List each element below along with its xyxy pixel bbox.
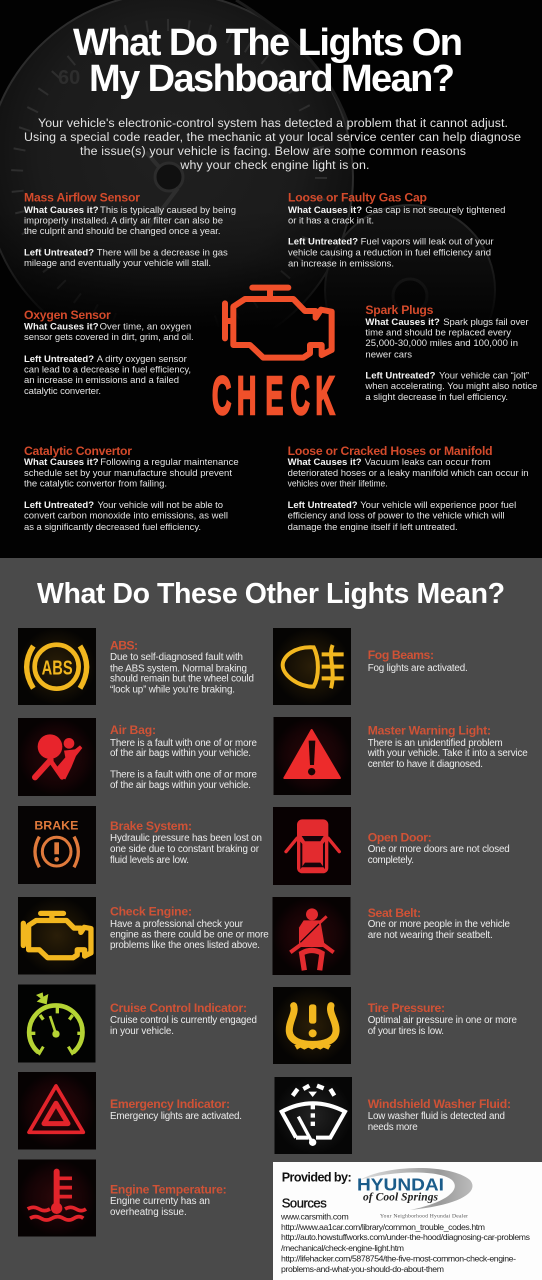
text: tire pressure description: of your tires is low. xyxy=(368,1026,444,1037)
heading: brake system: Brake System: xyxy=(110,819,192,833)
text: washer description: Low washer fluid is detected and xyxy=(368,1111,505,1122)
icon: fog beams xyxy=(273,628,351,705)
text: master warning description: There is an unidentified problem xyxy=(368,738,503,749)
panel: open door xyxy=(273,807,510,885)
text: brake description xyxy=(110,833,262,866)
text: gas cap details: Fuel vapors will leak out of your xyxy=(361,237,494,248)
text: source links: /mechanical/check-engine-light.htm xyxy=(281,1243,404,1253)
text: oxygen sensor details: catalytic converter. xyxy=(24,386,101,397)
text: open door description xyxy=(368,844,510,866)
heading: master warning: Master Warning Light: xyxy=(368,723,491,737)
text: source links xyxy=(280,1211,531,1274)
panel: air bag xyxy=(18,718,258,796)
icon: engine temperature xyxy=(18,1160,96,1236)
logo: Hyundai of Cool Springs xyxy=(357,1168,472,1219)
icon: brake: BRAKE xyxy=(34,818,78,832)
panel: catalytic convertor xyxy=(24,444,239,533)
panel: cruise control xyxy=(18,984,257,1062)
text: oxygen sensor details: Left Untreated? xyxy=(24,354,94,365)
text: engine temperature description: Engine currenty has an xyxy=(110,1196,210,1207)
icon: brake xyxy=(18,806,96,884)
text: gas cap details: Gas cap is not securely tightened xyxy=(365,205,505,216)
logo: Hyundai of Cool Springs: HYUNDAI xyxy=(357,1175,444,1195)
intro text xyxy=(24,116,521,172)
text: ABS description: Due to self-diagnosed fault with xyxy=(110,652,243,663)
panel: ABS xyxy=(18,628,254,705)
label: CHECK: CHECK xyxy=(212,366,335,425)
title: My Dashboard Mean? xyxy=(89,58,455,100)
heading: gas cap: Loose or Faulty Gas Cap xyxy=(288,191,427,205)
text: check engine description: problems like the ones listed above. xyxy=(110,940,260,951)
text: brake description: Hydraulic pressure has been lost on xyxy=(110,833,262,844)
heading: seat belt: Seat Belt: xyxy=(368,906,421,920)
text: mass airflow details: What Causes it? xyxy=(24,205,99,216)
text: tire pressure description: Optimal air pressure in one or more xyxy=(368,1015,518,1026)
text: washer description: needs more xyxy=(368,1122,418,1133)
panel: seat belt xyxy=(272,897,511,975)
heading: washer fluid: Windshield Washer Fluid: xyxy=(368,1097,511,1111)
text: hoses details: Vacuum leaks can occur from xyxy=(365,457,491,468)
text: oxygen sensor details: sensor gets covered in dirt, grim, and oil. xyxy=(24,332,194,343)
text: air bag description: of the air bags within your vehicle. xyxy=(110,780,251,791)
panel: brake system xyxy=(18,806,262,884)
text: cruise description: in your vehicle. xyxy=(110,1026,174,1037)
intro text: Your vehicle's electronic-control system has detected a problem that it cannot adjust. xyxy=(38,116,508,130)
text: gas cap details: Left Untreated? xyxy=(288,237,358,248)
text: cruise description: Cruise control is currently engaged xyxy=(110,1015,257,1026)
intro text: the issue(s) your vehicle is facing. Below are some common reasons xyxy=(80,144,466,158)
icon: windshield washer xyxy=(274,1077,352,1154)
text: catalytic convertor details: as a significantly decreased fuel efficiency. xyxy=(24,522,201,533)
text: air bag description: There is a fault with one of or more xyxy=(110,770,258,780)
text: hoses details: damage the engine itself if left untreated. xyxy=(288,522,458,533)
panel: grey lower section xyxy=(0,558,542,1280)
title: What Do The Lights On xyxy=(73,22,463,64)
text: ABS description: “lock up” while you’re braking. xyxy=(110,685,235,696)
text: brake description: one side due to constant braking or xyxy=(110,844,260,855)
panel: oxygen sensor xyxy=(24,308,194,397)
logo: Hyundai of Cool Springs: of Cool Springs xyxy=(363,1192,439,1204)
heading: oxygen sensor: Oxygen Sensor xyxy=(24,308,111,322)
text: source links: www.carsmith.com xyxy=(280,1211,349,1221)
heading: tire pressure: Tire Pressure: xyxy=(368,1001,445,1015)
heading: sources: Sources xyxy=(282,1196,327,1211)
icon: emergency triangle xyxy=(18,1072,96,1150)
text: mass airflow details: There will be a decrease in gas xyxy=(97,248,228,258)
text: engine temperature description xyxy=(110,1196,210,1218)
text: fog description: Fog lights are activated. xyxy=(368,663,468,674)
text: brake description: fluid levels are low. xyxy=(110,855,189,866)
text: hoses details: efficiency and loss of power to the vehicle which will xyxy=(288,511,505,522)
text: spark plugs details: time and should be replaced every xyxy=(365,328,511,339)
text: catalytic convertor details: Left Untreated? xyxy=(24,500,94,511)
icon: large check engine light xyxy=(212,288,335,425)
text: spark plugs details: a slight decrease in fuel efficiency. xyxy=(365,392,508,403)
text: oxygen sensor details: Over time, an oxygen xyxy=(100,322,191,332)
title xyxy=(73,22,463,100)
heading: check engine: Check Engine: xyxy=(110,905,192,919)
panel: spark plugs xyxy=(364,303,537,403)
text: gas cap details: or it has a crack in it. xyxy=(288,216,374,226)
panel: windshield washer fluid xyxy=(274,1077,511,1154)
heading: emergency indicator: Emergency Indicator: xyxy=(110,1097,230,1111)
text: washer description xyxy=(368,1111,505,1133)
text: catalytic convertor details: schedule set by your manufacture should prevent xyxy=(24,468,232,479)
panel: provided by and sources xyxy=(273,1162,542,1280)
text: spark plugs details: What Causes it? xyxy=(365,317,440,328)
text: spark plugs details: 25,000-30,000 miles and 100,000 in xyxy=(365,338,518,349)
text: catalytic convertor details: the catalytic convertor from failing. xyxy=(24,479,167,490)
heading: fog beams: Fog Beams: xyxy=(368,648,434,662)
text: check engine description: engine as there could be one or more xyxy=(110,930,269,941)
text: oxygen sensor details: can lead to a decrease in fuel efficiency, xyxy=(24,364,191,376)
text: tire pressure description xyxy=(368,1015,518,1037)
text: spark plugs details xyxy=(364,317,537,403)
text: gas cap details: an increase in emissions. xyxy=(288,259,394,270)
intro text: why your check engine light is on. xyxy=(179,158,369,172)
heading: hoses or manifold: Loose or Cracked Hoses or Manifold xyxy=(288,444,493,458)
text: oxygen sensor details: A dirty oxygen sensor xyxy=(97,354,187,365)
text: catalytic convertor details: convert carbon monoxide into emissions, as well xyxy=(24,511,228,522)
panel: fog beams xyxy=(273,628,468,705)
icon: seat belt xyxy=(272,897,350,975)
icon: master warning xyxy=(274,717,351,795)
text: source links: http://auto.howstuffworks.com/under-the-hood/diagnosing-car-problems xyxy=(281,1232,531,1242)
text: cruise description xyxy=(110,1015,257,1037)
text: source links: http://www.aa1car.com/library/common_trouble_codes.htm xyxy=(281,1222,485,1232)
text: hoses details: vehicles over their lifetime. xyxy=(288,479,388,490)
text: hoses details: Left Untreated? xyxy=(288,500,358,511)
heading: catalytic convertor: Catalytic Convertor xyxy=(24,444,132,458)
text: oxygen sensor details: What Causes it? xyxy=(24,322,99,332)
text: hoses details: Your vehicle will experience poor fuel xyxy=(360,500,516,511)
text: check engine description: Have a professional check your xyxy=(110,919,244,930)
heading: cruise control: Cruise Control Indicator: xyxy=(110,1001,247,1015)
text: spark plugs details: when accelerating. You might also notice xyxy=(364,381,537,392)
text: master warning description: with your vehicle. Take it into a service xyxy=(367,748,528,759)
panel: check engine xyxy=(18,897,269,974)
text: oxygen sensor details: an increase in emissions and a failed xyxy=(24,375,179,386)
text: air bag description: of the air bags within your vehicle. xyxy=(110,748,251,759)
panel: engine temperature xyxy=(18,1160,227,1236)
icon: ABS xyxy=(18,628,96,705)
text: hoses details: What Causes it? xyxy=(288,457,362,468)
text: air bag description xyxy=(110,738,258,791)
text: ABS description xyxy=(110,652,254,696)
panel: black dashboard background xyxy=(0,0,542,558)
panel: black dashboard background: 60 xyxy=(58,67,80,89)
panel: tire pressure xyxy=(273,987,518,1064)
text: emergency description: Emergency lights are activated. xyxy=(110,1111,242,1122)
text: master warning description: center to have it diagnosed. xyxy=(368,759,483,770)
text: gas cap details: vehicle causing a reduction in fuel efficiency and xyxy=(288,248,491,259)
heading: other lights: What Do These Other Lights Mean? xyxy=(37,578,505,610)
text: engine temperature description: overheatng issue. xyxy=(110,1207,187,1218)
icon: check engine xyxy=(18,897,96,974)
text: spark plugs details: Your vehicle can “jolt” xyxy=(439,371,529,382)
heading: mass airflow sensor: Mass Airflow Sensor xyxy=(24,191,140,205)
text: gas cap details xyxy=(288,205,505,270)
icon: cruise control xyxy=(18,984,96,1062)
icon: tire pressure xyxy=(273,987,351,1064)
text: mass airflow details: improperly installed. A dirty air filter can also be xyxy=(24,216,223,226)
text: mass airflow details: mileage and eventually your vehicle will stall. xyxy=(24,258,211,269)
panel: emergency indicator xyxy=(18,1072,242,1150)
text: open door description: completely. xyxy=(368,855,414,866)
text: catalytic convertor details xyxy=(24,457,239,533)
heading: air bag: Air Bag: xyxy=(110,723,156,737)
panel: master warning light xyxy=(274,717,528,795)
icon: ABS: ABS xyxy=(42,656,73,679)
text: oxygen sensor details xyxy=(24,322,194,397)
text: source links: http://lifehacker.com/5878754/the-five-most-common-check-engine- xyxy=(281,1254,516,1264)
text: seat belt description xyxy=(368,919,511,941)
text: spark plugs details: newer cars xyxy=(365,350,412,361)
text: master warning description xyxy=(367,738,528,770)
text: air bag description: There is a fault with one of or more xyxy=(110,738,258,749)
text: hoses details: deteriorated hoses or a leaky manifold which can occur in xyxy=(288,468,529,479)
text: spark plugs details: Left Untreated? xyxy=(365,371,436,382)
text: mass airflow details: the culprit and should be changed once a year. xyxy=(24,226,220,237)
text: check engine description xyxy=(110,919,269,951)
text: provided by: Provided by: xyxy=(282,1171,352,1185)
icon: air bag xyxy=(18,718,96,796)
text: mass airflow details: Left Untreated? xyxy=(24,248,94,258)
text: ABS description: the ABS system. Normal braking xyxy=(110,664,247,675)
text: mass airflow details xyxy=(24,205,236,269)
text: open door description: One or more doors are not closed xyxy=(368,844,510,855)
text: seat belt description: One or more people in the vehicle xyxy=(368,919,511,930)
heading: engine temperature: Engine Temperature: xyxy=(110,1183,227,1197)
text: catalytic convertor details: What Causes it? xyxy=(24,457,99,468)
text: source links: problems-and-what-you-should-do-about-them xyxy=(281,1264,444,1274)
icon: open door xyxy=(273,807,351,885)
intro text: Using a special code reader, the mechanic at your local service center can help diagnose xyxy=(24,130,521,144)
panel: hoses or manifold xyxy=(288,444,529,533)
text: catalytic convertor details: Following a regular maintenance xyxy=(100,457,239,468)
panel: loose or faulty gas cap xyxy=(288,191,505,270)
text: seat belt description: are not wearing their seatbelt. xyxy=(368,930,493,941)
heading: ABS: ABS: xyxy=(110,638,138,652)
text: mass airflow details: This is typically caused by being xyxy=(100,205,236,216)
panel: mass airflow sensor xyxy=(24,191,236,269)
text: catalytic convertor details: Your vehicle will not be able to xyxy=(98,500,223,511)
logo: Hyundai of Cool Springs: Your Neighborhood Hyundai Dealer xyxy=(380,1213,468,1219)
heading: open door: Open Door: xyxy=(368,831,432,845)
heading: spark plugs: Spark Plugs xyxy=(365,303,434,317)
text: ABS description: should remain but the wheel could xyxy=(110,674,254,685)
text: gas cap details: What Causes it? xyxy=(288,205,362,216)
text: hoses details xyxy=(288,457,529,533)
text: spark plugs details: Spark plugs fail over xyxy=(443,317,529,328)
